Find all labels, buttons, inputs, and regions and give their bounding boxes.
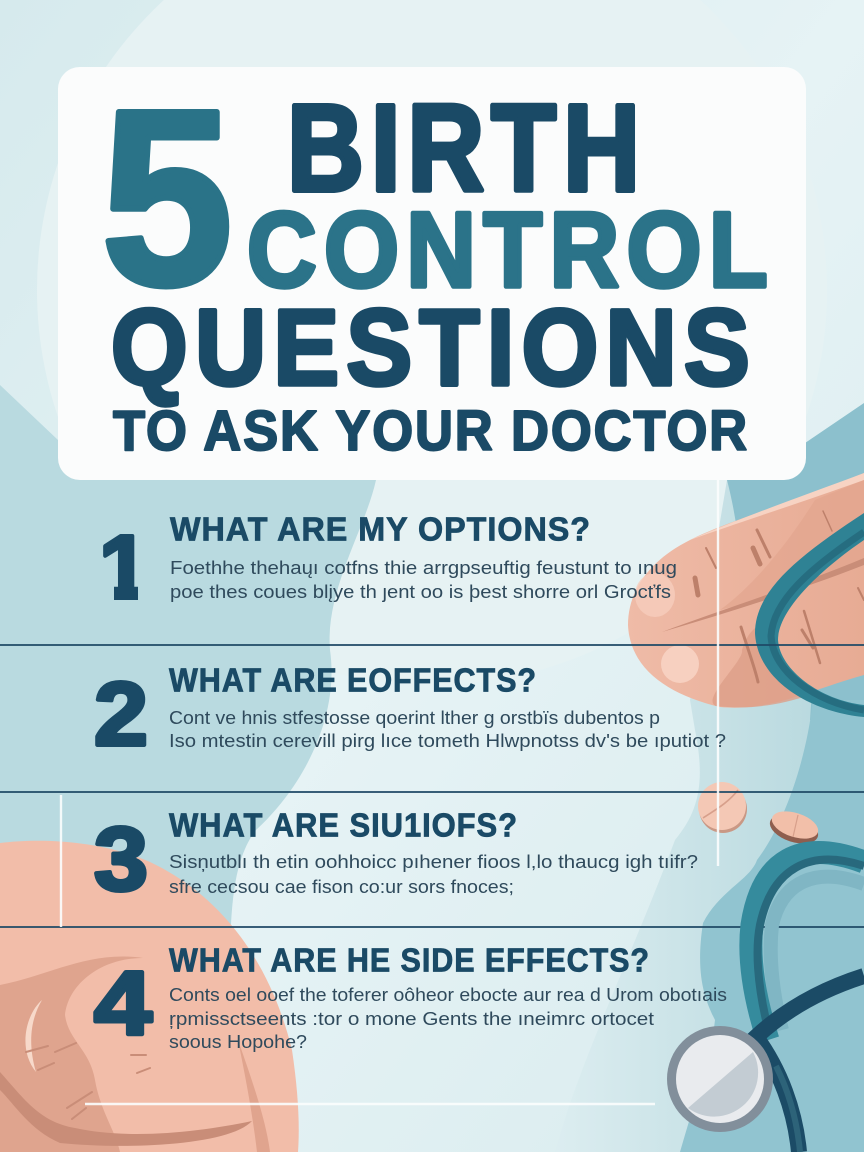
hand illustration: lower left — [0, 841, 299, 1152]
number 1: 1 — [99, 518, 149, 618]
question 4 body: ŗpmissctseents :tor o mone Gents the ıneimrc ortocet — [169, 1008, 654, 1029]
title: 5: 5 — [101, 58, 233, 337]
question 4 body: soous Hopohe? — [169, 1031, 307, 1052]
question 2 body: Iso mtestin cerevill pirg lıce tometh Hlwpnotss dv's be ıputiot ? — [169, 730, 726, 751]
question 3 heading: WHAT ARE SIU1IOFS? — [169, 806, 518, 844]
question 4 body: Conts oel ooef the toferer oôheor ebocte aur rea d Urom obotıais — [169, 984, 727, 1005]
question 4 heading: WHAT ARE HE SIDE EFFECTS? — [169, 942, 650, 978]
question 1 — [103, 516, 676, 602]
dividers — [0, 480, 864, 1104]
question 3 body: sfre cecsou cae fison co:ur sors fnoces; — [169, 876, 514, 897]
title: questions: QUESTIONS — [111, 286, 757, 408]
number 2: 2 — [94, 665, 148, 765]
title: to ask your doctor: TO ASK YOUR DOCTOR — [113, 399, 749, 463]
pill: oval — [766, 806, 822, 849]
title: control: CONTROL — [247, 190, 775, 310]
pill: round — [698, 782, 747, 833]
stethoscope lower — [751, 853, 864, 1152]
stethoscope chest piece — [667, 1026, 773, 1132]
number 4: 4 — [94, 954, 152, 1054]
question 1 body: poe thes coues blįye th ȷent oo is þest shorre orl Grocťfs — [170, 581, 671, 602]
question 2 body — [169, 707, 726, 751]
title: birth: BIRTH — [287, 80, 647, 218]
question 2 body: Cont ve hnis stfestosse qoerint lther g orstbïs dubentos p — [169, 707, 660, 728]
question 4 body — [169, 984, 727, 1052]
number 3: 3 — [94, 810, 148, 910]
question 4 — [94, 942, 727, 1054]
question 3 body: Sisņutblı th etin oohhoicc pıhener fioos l,lo thaucg igh tıifr? — [169, 851, 698, 872]
question 1 body: Foethhe thehaųı cotfns thie arrgpseuftig feustunt to ınug — [170, 557, 677, 578]
question 3 — [94, 806, 698, 910]
question 2 — [94, 662, 726, 765]
question 2 heading: WHAT ARE EOFFECTS? — [169, 662, 537, 698]
title card — [58, 67, 806, 480]
question 1 heading: WHAT ARE MY OPTIONS? — [170, 510, 591, 548]
hand illustration: upper right finger — [628, 473, 864, 708]
question 3 body — [169, 851, 698, 897]
stethoscope tube around finger — [755, 513, 864, 717]
pills — [698, 782, 822, 849]
question 1 body — [170, 557, 677, 602]
